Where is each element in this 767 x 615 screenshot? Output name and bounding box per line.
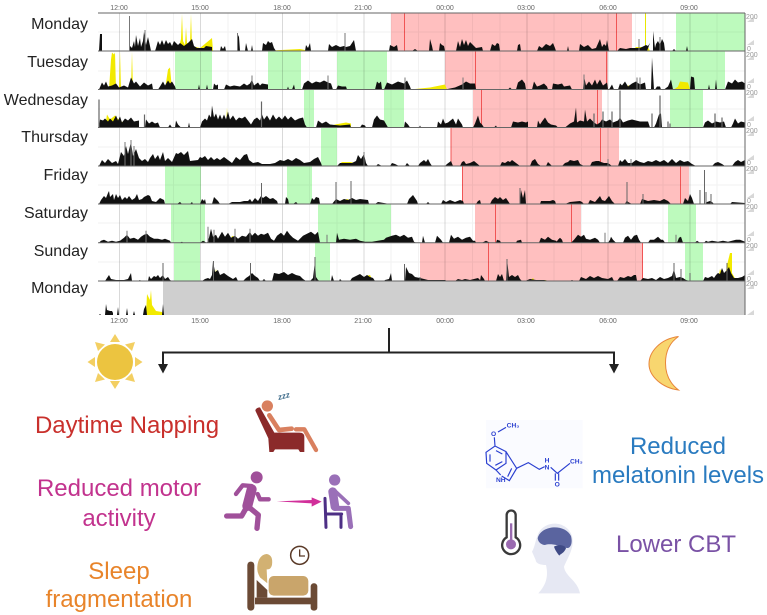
icon: melatonin molecule xyxy=(486,420,583,488)
right scale labels: 200 xyxy=(746,90,758,97)
right scale labels: 0 xyxy=(747,46,751,53)
right scale labels: 0 xyxy=(747,122,751,129)
chart axes xyxy=(98,13,745,315)
day labels: Wednesday xyxy=(4,92,88,109)
heading: sleep fragmentation: Sleep xyxy=(88,558,150,585)
icon: moon xyxy=(649,336,678,390)
top time axis labels: 00:00 xyxy=(436,5,454,12)
heading: sleep fragmentation xyxy=(46,558,192,613)
heading: daytime napping: Daytime Napping xyxy=(35,412,219,439)
bottom time axis labels: 09:00 xyxy=(680,318,698,325)
day labels: Tuesday xyxy=(27,54,88,71)
row 2 activity xyxy=(99,52,745,90)
day labels: Monday xyxy=(31,280,88,297)
heading: reduced melatonin levels: melatonin levels xyxy=(592,462,764,489)
row 4 activity xyxy=(99,140,745,166)
right scale labels: 0 xyxy=(747,198,751,205)
right scale labels: 0 xyxy=(747,84,751,91)
top time axis labels: 12:00 xyxy=(110,5,128,12)
day labels: Monday xyxy=(31,16,88,33)
icon: melatonin molecule: N xyxy=(545,464,550,471)
top time axis labels: 03:00 xyxy=(517,5,535,12)
row 7 activity xyxy=(105,253,745,281)
top time axis labels: 06:00 xyxy=(599,5,617,12)
heading: reduced motor activity xyxy=(37,475,201,532)
grey no-data zone xyxy=(163,281,745,315)
heading: sleep fragmentation: fragmentation xyxy=(46,586,192,613)
icon: melatonin molecule: O xyxy=(555,481,560,488)
day labels xyxy=(4,16,88,297)
green activity-rest zones xyxy=(165,13,745,281)
red sleep markers xyxy=(404,13,680,281)
row 1 activity xyxy=(99,14,688,51)
right scale labels: 200 xyxy=(746,14,758,21)
top time axis labels: 21:00 xyxy=(354,5,372,12)
right scale labels xyxy=(746,14,758,315)
icon: sun xyxy=(88,334,142,389)
bottom time axis labels xyxy=(110,318,698,325)
heading: reduced motor activity: Reduced motor xyxy=(37,475,201,502)
bottom time axis labels: 15:00 xyxy=(191,318,209,325)
row 5 activity xyxy=(99,170,745,204)
bottom time axis labels: 06:00 xyxy=(599,318,617,325)
right scale labels: 200 xyxy=(746,52,758,59)
right scale labels: 200 xyxy=(746,204,758,211)
row 8 activity xyxy=(99,290,164,315)
bottom time axis labels: 21:00 xyxy=(354,318,372,325)
day labels: Thursday xyxy=(21,129,88,146)
heading: lower CBT: Lower CBT xyxy=(616,531,736,558)
icon: thermometer xyxy=(502,510,520,554)
icon: napping person in armchair xyxy=(255,390,316,452)
right scale labels: 0 xyxy=(747,237,751,244)
icon: napping person in armchair: zzz xyxy=(276,390,291,402)
day labels: Friday xyxy=(44,167,88,184)
top time axis labels xyxy=(110,5,698,12)
day labels: Sunday xyxy=(34,243,88,260)
right scale labels: 200 xyxy=(746,166,758,173)
top time axis labels: 09:00 xyxy=(680,5,698,12)
heading: reduced melatonin levels: Reduced xyxy=(630,433,726,460)
day labels: Saturday xyxy=(24,205,88,222)
actogram chart xyxy=(98,5,758,325)
icon: melatonin molecule: O xyxy=(491,431,496,438)
icon: melatonin molecule: CH₃ xyxy=(570,458,583,465)
right scale labels: 0 xyxy=(747,160,751,167)
row 3 activity xyxy=(99,90,745,128)
icon: melatonin molecule: NH xyxy=(496,477,506,484)
bottom time axis labels: 03:00 xyxy=(517,318,535,325)
icon: melatonin molecule: H xyxy=(545,457,550,464)
heading: reduced melatonin levels xyxy=(592,433,764,489)
row 6 activity xyxy=(99,227,745,243)
icon: human head with brain xyxy=(532,524,580,593)
bottom time axis labels: 18:00 xyxy=(273,318,291,325)
bottom time axis labels: 12:00 xyxy=(110,318,128,325)
icon: runner to seated person xyxy=(227,471,351,528)
heading: reduced motor activity: activity xyxy=(82,505,156,532)
right scale labels: 0 xyxy=(747,276,751,283)
icon: melatonin molecule: CH₃ xyxy=(507,422,519,429)
red sleep zones xyxy=(391,13,689,281)
icon: person awake in bed with clock xyxy=(247,546,317,611)
top time axis labels: 15:00 xyxy=(191,5,209,12)
right scale labels: 200 xyxy=(746,243,758,250)
right scale labels: 200 xyxy=(746,281,758,288)
right scale labels: 200 xyxy=(746,128,758,135)
branching arrow xyxy=(158,328,619,374)
top time axis labels: 18:00 xyxy=(273,5,291,12)
bottom time axis labels: 00:00 xyxy=(436,318,454,325)
